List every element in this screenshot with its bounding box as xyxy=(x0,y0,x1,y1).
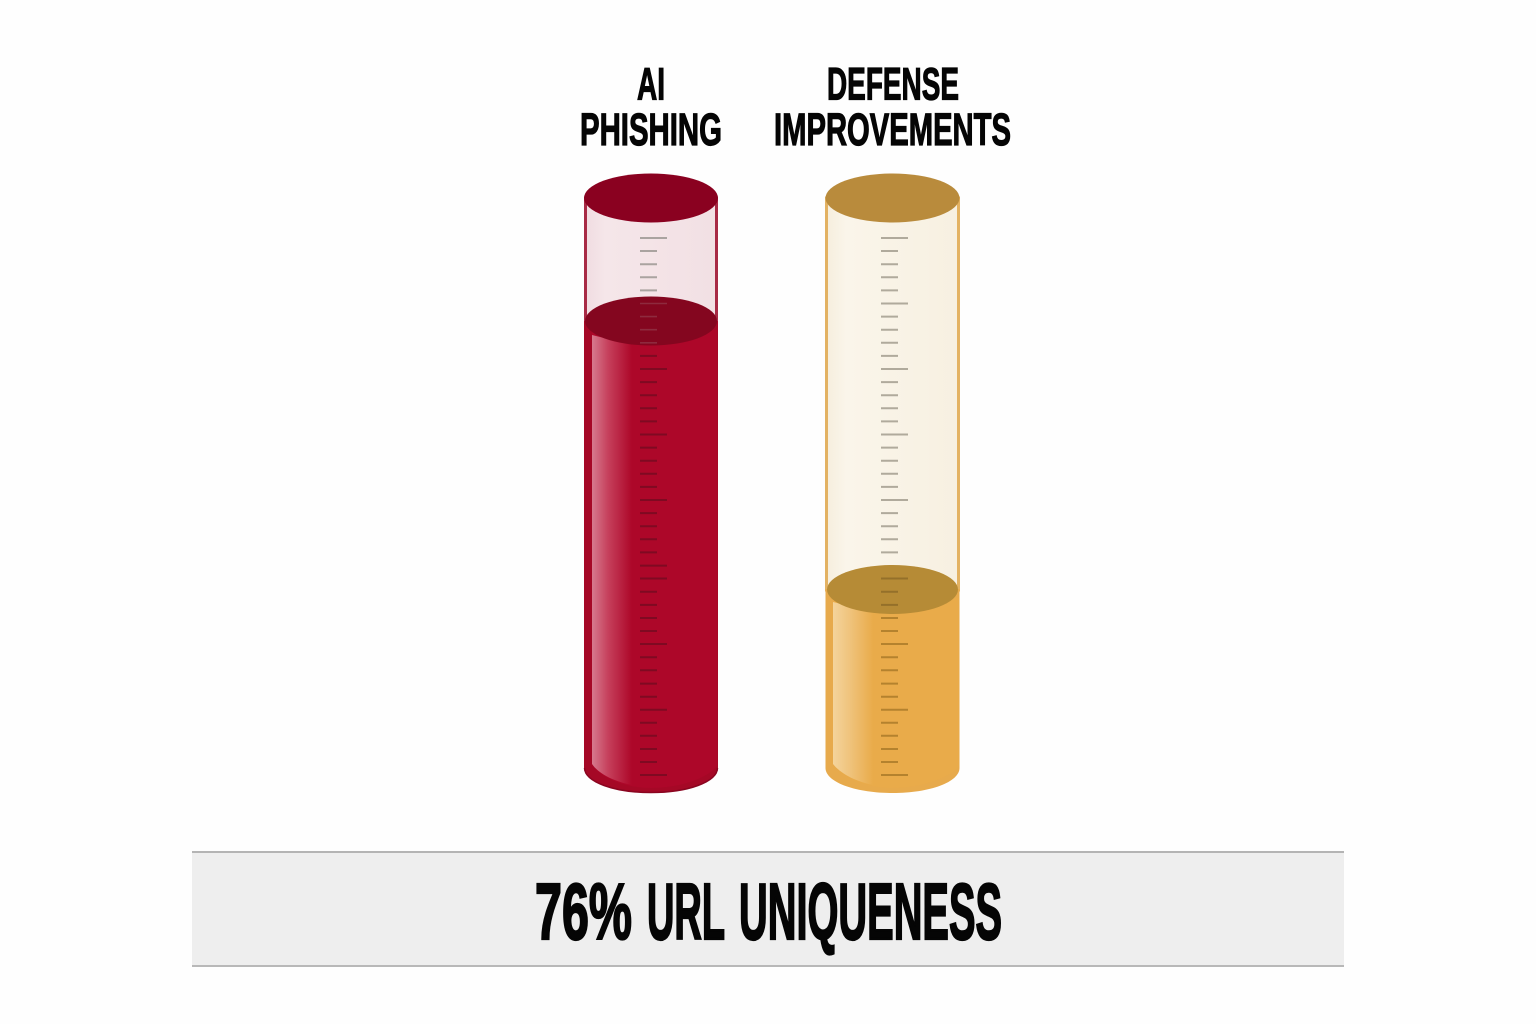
amber liquid column xyxy=(826,589,960,793)
glass body xyxy=(586,198,716,322)
heading: Defense Improvements: DEFENSE xyxy=(827,58,959,110)
scale ticks on glass xyxy=(640,238,667,290)
heading: AI Phishing: AI xyxy=(637,58,665,110)
red liquid column xyxy=(584,321,718,793)
liquid inner face xyxy=(833,598,959,788)
scale ticks on glass xyxy=(881,238,908,552)
band text: 76% xyxy=(535,867,632,956)
band text: URL xyxy=(647,867,725,956)
liquid bottom edge xyxy=(584,768,718,792)
heading: Defense Improvements xyxy=(774,58,1011,155)
band background xyxy=(192,851,1344,966)
scale ticks in liquid xyxy=(640,356,667,775)
liquid highlight xyxy=(833,602,873,785)
band text xyxy=(535,867,1002,956)
liquid surface xyxy=(827,565,958,614)
heading: Defense Improvements: IMPROVEMENTS xyxy=(774,104,1011,155)
scale ticks through surface xyxy=(640,304,667,343)
cylinder: AI Phishing, red, high fill xyxy=(584,174,718,793)
heading: AI Phishing xyxy=(580,58,722,155)
top opening xyxy=(584,174,718,222)
heading: AI Phishing: PHISHING xyxy=(580,104,722,155)
liquid inner face xyxy=(592,330,717,788)
top opening xyxy=(826,174,960,222)
liquid surface xyxy=(585,296,717,346)
callout band: 76% URL uniqueness: UNIQUENESS xyxy=(739,867,1002,956)
callout band: 76% URL uniqueness xyxy=(192,851,1344,967)
liquid highlight xyxy=(592,335,632,785)
glass body xyxy=(826,198,958,590)
cylinder: Defense Improvements, amber, low fill xyxy=(826,174,960,793)
scale ticks through surface xyxy=(881,578,908,605)
scale ticks in liquid xyxy=(881,618,908,775)
